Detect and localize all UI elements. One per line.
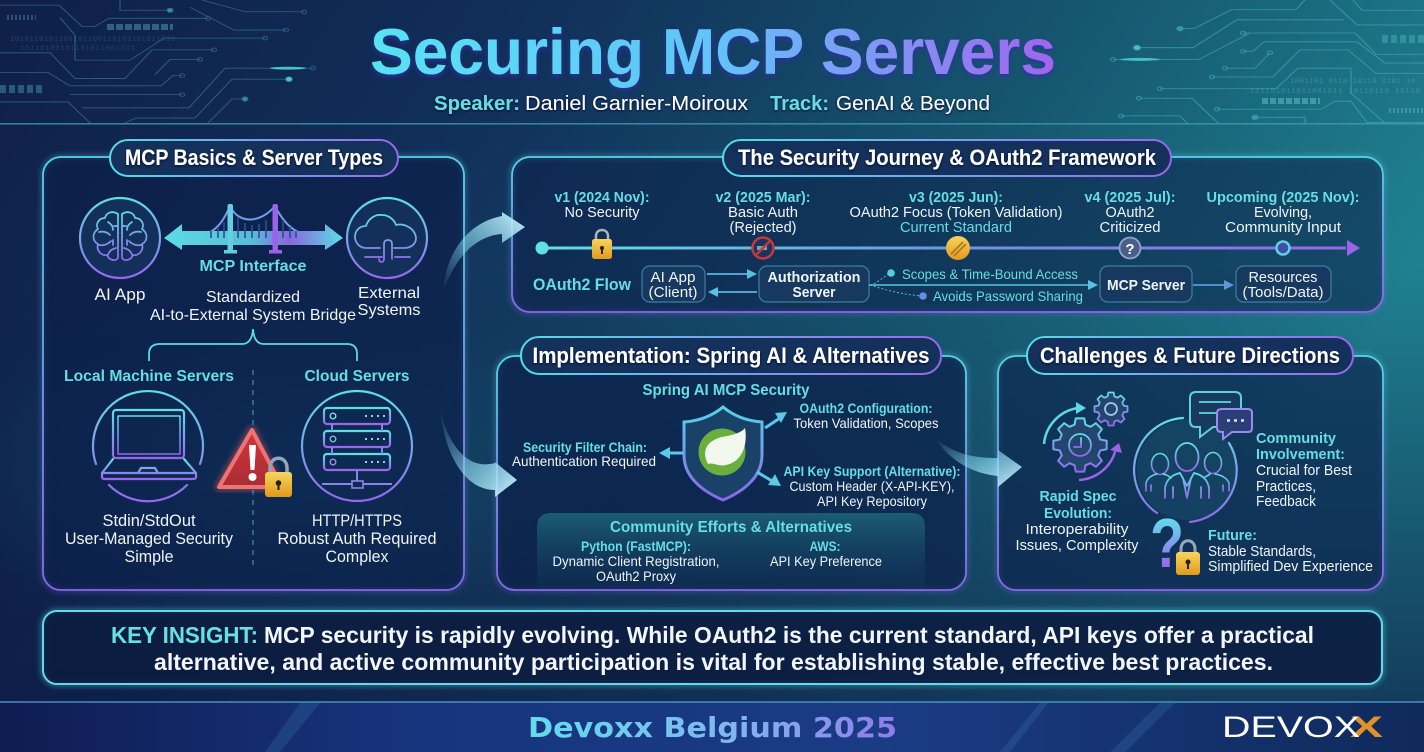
box: MCP server: [1100, 266, 1192, 302]
milestone v3: Current Standard: [900, 219, 1012, 236]
text: Python FastMCP: Dynamic Client Registration,: [552, 553, 720, 569]
binary decoration left: 1010110101100101100110101101011010: [10, 36, 175, 44]
label: MCP interface: MCP Interface: [200, 258, 307, 275]
label: OAuth2 flow: OAuth2 Flow: [533, 275, 632, 294]
milestone upcoming: [1206, 189, 1360, 254]
icon: server rack: [302, 391, 412, 501]
heading: cloud servers: Cloud Servers: [304, 368, 410, 385]
heading: MCP basics: MCP Basics & Server Types: [125, 145, 383, 170]
box: authorization server: Authorization: [768, 269, 860, 286]
text: local server traits: Simple: [124, 547, 174, 566]
text: bridge description: AI-to-External System Bridge: [150, 307, 356, 324]
arrow: basics to security journey: [443, 212, 525, 292]
text: future: Simplified Dev Experience: [1208, 558, 1373, 575]
milestone upcoming: Community Input: [1225, 219, 1342, 236]
text: community involvement: Crucial for Best: [1256, 462, 1353, 479]
heading: implementation: Implementation: Spring AI & Alternatives: [532, 343, 930, 368]
arrows: client and authorization server: [707, 269, 757, 297]
text: cloud server traits: HTTP/HTTPS: [312, 511, 402, 530]
text: local server traits: [65, 511, 233, 566]
heading: implementation: [521, 337, 941, 374]
arrow: to security filter chain: [659, 447, 683, 459]
box: authorization server: [759, 266, 869, 302]
text: API key support: Custom Header (X-API-KEY),: [790, 478, 954, 494]
logo: Devoxx: X: [1350, 711, 1383, 744]
text: OAuth2 configuration: OAuth2 Configuration:: [800, 400, 932, 416]
text: OAuth2 configuration: Token Validation, Scopes: [794, 415, 938, 431]
label: external systems: [358, 285, 420, 319]
binary decoration right: 1001101 0110 10110 0101 10: [1290, 78, 1415, 86]
panel: implementation: [497, 337, 966, 590]
milestone v4: [1084, 189, 1176, 258]
heading: challenges: [1027, 337, 1353, 374]
speaker and track line: Track:: [770, 93, 829, 115]
label: scopes: Scopes & Time-Bound Access: [902, 266, 1078, 282]
milestone v2: [716, 189, 810, 258]
text: security filter chain: Security Filter Chain:: [523, 439, 647, 455]
footer event title: Devoxx Belgium 2025: [528, 711, 897, 744]
milestone v1: v1 (2024 Nov):: [554, 189, 650, 206]
binary decoration left: [0, 18, 175, 89]
speaker and track line: Daniel Garnier-Moiroux: [525, 93, 748, 115]
icon: gears and cycle arrows: [1044, 392, 1128, 480]
brace connector: [149, 329, 357, 361]
heading: MCP basics: [110, 140, 398, 176]
panel: key insight: [43, 611, 1382, 684]
binary decoration right: [1250, 39, 1424, 110]
sub-panel: community efforts: [537, 513, 925, 589]
box: MCP server: MCP Server: [1107, 277, 1185, 294]
milestone v4: OAuth2: [1106, 204, 1154, 221]
text: rapid spec evolution: Evolution:: [1044, 505, 1112, 522]
header divider: [0, 123, 1424, 125]
text: security filter chain: Authentication Required: [512, 453, 656, 469]
box: AI app client: (Client): [648, 284, 698, 301]
icon: laptop: [93, 391, 203, 501]
logo: Devoxx: DEVOX: [1222, 711, 1360, 744]
milestone v4: Criticized: [1100, 219, 1160, 236]
text: community involvement: Practices,: [1256, 478, 1316, 495]
arrow: to OAuth2 configuration: [765, 412, 787, 428]
text: rapid spec evolution: Issues, Complexity: [1016, 537, 1139, 554]
text: cloud server traits: Complex: [326, 547, 389, 566]
icon: MCP bridge double arrow: [164, 204, 343, 254]
box: AI app client: AI App: [650, 269, 696, 286]
text: future: Future:: [1208, 527, 1257, 544]
icon: community people circle: [1134, 418, 1237, 522]
milestone v2: (Rejected): [730, 219, 796, 236]
heading: Spring AI MCP security: Spring AI MCP Security: [642, 382, 810, 399]
text: future: [1208, 527, 1373, 575]
box: resources: Resources: [1248, 269, 1318, 286]
box: resources: [1236, 266, 1331, 302]
text: community involvement: Feedback: [1256, 493, 1316, 510]
text: cloud server traits: [278, 511, 436, 566]
heading: security journey: The Security Journey & OAuth2 Framework: [738, 145, 1157, 170]
label: avoids password sharing: Avoids Password Sharing: [933, 288, 1083, 304]
icon: warning triangle: [219, 430, 282, 487]
arrow: to API key support: [757, 472, 781, 486]
text: API key support: API Key Repository: [817, 493, 927, 509]
icon: spring shield: [684, 407, 762, 500]
text: Python FastMCP: [552, 538, 720, 584]
text: community involvement: [1256, 430, 1353, 510]
binary decoration right: 101101011011001011 10110110 10110: [1250, 88, 1420, 96]
milestone v2: Basic Auth: [728, 204, 798, 221]
arrow: basics to implementation: [440, 410, 517, 497]
milestone v2: v2 (2025 Mar):: [716, 189, 810, 206]
text: local server traits: User-Managed Security: [65, 529, 233, 548]
speaker and track line: Speaker:: [434, 93, 520, 115]
footer band: [0, 701, 1424, 752]
heading: challenges: Challenges & Future Directions: [1040, 343, 1340, 368]
text: bridge description: [150, 289, 356, 324]
icon: external systems cloud: [347, 198, 427, 278]
box: authorization server: Server: [792, 284, 836, 301]
icon: question mark and lock: ?: [1150, 504, 1184, 582]
label: external systems: Systems: [358, 302, 420, 319]
text: security filter chain: [512, 439, 656, 469]
milestone v4: ?: [1125, 241, 1135, 258]
text: rapid spec evolution: Rapid Spec: [1040, 488, 1116, 505]
heading: local machine servers: Local Machine Servers: [64, 368, 234, 385]
text: AWS: API Key Preference: [770, 553, 882, 569]
text: key insight line two: alternative, and active community participation is vital for establishing stable, effective best practices.: [154, 649, 1273, 675]
text: OAuth2 configuration: [794, 400, 938, 431]
title: Securing MCP Servers: [370, 15, 1056, 88]
milestone upcoming: Evolving,: [1254, 204, 1312, 221]
panel: MCP basics and server types: [43, 140, 464, 590]
speaker and track line: GenAI & Beyond: [836, 93, 990, 115]
text: future: Stable Standards,: [1208, 543, 1316, 560]
text: key insight label: KEY INSIGHT:: [111, 622, 258, 648]
text: API key support: API Key Support (Alternative):: [784, 463, 960, 479]
text: Python FastMCP: Python (FastMCP):: [581, 538, 691, 554]
text: cloud server traits: Robust Auth Required: [278, 529, 436, 548]
box: AI app client: [642, 266, 705, 302]
text: rapid spec evolution: [1016, 488, 1139, 554]
text: rapid spec evolution: Interoperability: [1026, 521, 1129, 538]
heading: security journey: [723, 140, 1171, 176]
text: AWS: [770, 538, 882, 569]
box: resources: (Tools/Data): [1242, 284, 1324, 301]
icon: speech bubbles: [1190, 392, 1252, 439]
arrow: MCP server to resources: [1193, 280, 1234, 290]
text: AWS: AWS:: [810, 538, 840, 554]
circuit pattern left: [0, 0, 316, 124]
arrow: implementation to challenges: [935, 438, 1022, 487]
icon: gold lock: [265, 458, 292, 497]
text: bridge description: Standardized: [206, 289, 300, 306]
circuit pattern right: [1110, 0, 1424, 124]
milestone upcoming: Upcoming (2025 Nov):: [1206, 189, 1360, 206]
milestone v3: [850, 189, 1062, 260]
label: external systems: External: [358, 285, 420, 302]
arrow: authorization server to MCP server: [869, 269, 1098, 300]
icon: AI app brain: [80, 198, 160, 278]
binary decoration left: 10110100101101011001011: [20, 45, 135, 53]
text: community involvement: Involvement:: [1256, 446, 1345, 463]
logo: Devoxx: [1222, 711, 1383, 744]
text: Python FastMCP: OAuth2 Proxy: [596, 568, 676, 584]
milestone v1: No Security: [564, 204, 640, 221]
timeline: [536, 240, 1360, 256]
text: local server traits: Stdin/StdOut: [102, 511, 196, 530]
text: key insight line one: MCP security is rapidly evolving. While OAuth2 is the current standard, API keys offer a practical: [264, 622, 1314, 648]
panel: challenges and future: [998, 337, 1383, 590]
milestone v4: v4 (2025 Jul):: [1084, 189, 1176, 206]
text: API key support: [784, 463, 960, 509]
milestone v3: OAuth2 Focus (Token Validation): [850, 204, 1062, 221]
milestone v1: [554, 189, 650, 259]
panel: security journey and OAuth2: [512, 140, 1383, 312]
label: AI app: AI App: [94, 285, 146, 304]
heading: community efforts: Community Efforts & Alternatives: [610, 519, 852, 536]
speaker and track line: [434, 93, 990, 115]
milestone v3: v3 (2025 Jun):: [909, 189, 1003, 206]
text: community involvement: Community: [1256, 430, 1337, 447]
